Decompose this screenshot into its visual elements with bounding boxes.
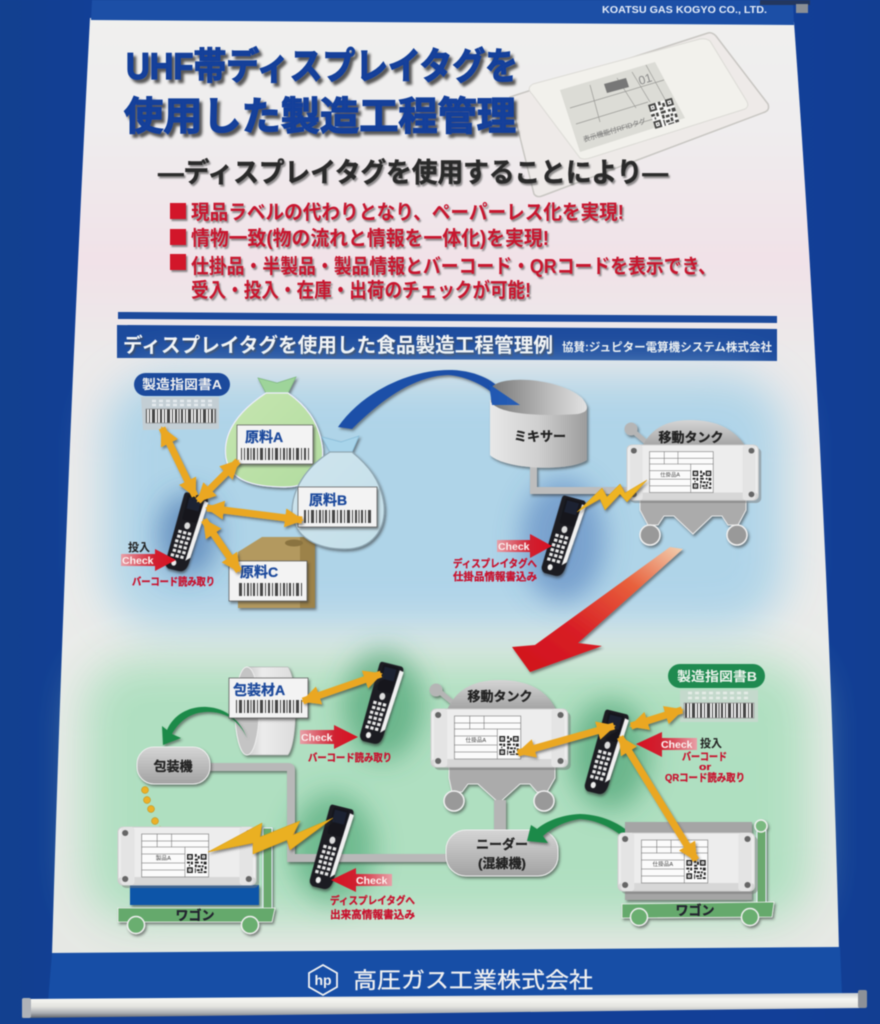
logo: hp xyxy=(314,972,332,988)
sponsor credit: 協賛:ジュピター電算機システム株式会社 xyxy=(562,340,772,354)
instruction sheet B pill: 製造指図書B xyxy=(677,669,757,684)
label: material C xyxy=(229,561,307,601)
handheld scanner xyxy=(359,661,405,747)
label: packaging material A: 包装材A xyxy=(233,682,285,698)
packaging machine xyxy=(137,747,210,784)
display tag on wagon: 仕掛品A xyxy=(653,860,673,868)
wireless lightning bolt xyxy=(577,480,647,512)
bag: material B xyxy=(292,436,384,549)
section heading text: ディスプレイタグを使用した食品製造工程管理例 xyxy=(123,333,553,357)
subtitle: —ディスプレイタグを使用することにより— xyxy=(158,157,668,188)
wagon with semi-finished goods xyxy=(622,820,774,926)
display tag on wagon xyxy=(118,827,259,888)
company name: 高圧ガス工業株式会社 xyxy=(353,968,593,993)
hanging rod xyxy=(22,990,867,1018)
scanner glows xyxy=(158,478,650,903)
big red transition arrow xyxy=(512,547,683,672)
double arrow xyxy=(303,674,381,701)
panel background: blue process xyxy=(105,375,785,630)
step: kneading xyxy=(430,664,774,926)
title: UHF帯ディスプレイタグを xyxy=(126,45,518,87)
wagon with finished goods xyxy=(118,828,275,934)
packaging machine: 包装機 xyxy=(153,759,193,774)
kneader machine xyxy=(446,830,558,876)
top blue band xyxy=(91,0,810,25)
barcode reading caption: バーコード読み取り xyxy=(132,575,215,588)
moving tank (lower): 移動タンク xyxy=(467,689,533,704)
panel background: green process xyxy=(85,660,810,922)
green arc arrow xyxy=(527,814,640,845)
handheld scanner xyxy=(540,495,587,579)
check arrow xyxy=(636,732,697,757)
kneader machine: (混練機) xyxy=(478,856,526,871)
handheld scanner xyxy=(308,804,355,892)
check arrow xyxy=(300,725,358,749)
write caption xyxy=(453,557,537,583)
write caption: ディスプレイタグへ xyxy=(453,557,537,570)
wireless lightning bolt xyxy=(208,818,333,854)
logo xyxy=(309,965,337,995)
label: material A: 原料A xyxy=(245,429,283,445)
photo of display tag: 01 xyxy=(637,70,654,88)
benefit bullets: 現品ラベルの代わりとなり、ペーパーレス化を実現! xyxy=(191,201,624,224)
photo of display tag xyxy=(510,33,769,197)
wagon with semi-finished goods: ワゴン xyxy=(675,903,715,918)
moving tank (upper): 移動タンク xyxy=(658,430,724,445)
check arrow: Check xyxy=(498,541,530,553)
dotted transfer path xyxy=(142,786,164,834)
divider bar xyxy=(118,312,777,323)
title xyxy=(124,45,518,139)
barcode or QR caption xyxy=(665,751,745,784)
benefit bullets xyxy=(170,201,716,302)
mixer xyxy=(489,380,640,494)
barcode reading caption: バーコード読み取り xyxy=(308,751,392,764)
write caption: ディスプレイタグへ xyxy=(330,894,415,907)
label: material B xyxy=(298,487,377,527)
instruction sheet B barcode xyxy=(680,690,758,722)
step: write to tag xyxy=(453,480,647,583)
kneader machine: ニーダー xyxy=(476,837,528,852)
instruction sheet A pill xyxy=(134,373,230,396)
moving tank (lower) xyxy=(430,680,556,832)
write caption: 出来高情報書込み xyxy=(330,908,416,921)
footer band xyxy=(48,947,842,1002)
instruction sheet A barcode xyxy=(141,397,219,430)
handheld scanner xyxy=(164,491,209,574)
instruction sheet A pill: 製造指図書A xyxy=(142,377,223,392)
label: material B: 原料B xyxy=(309,492,347,508)
display tag on tank xyxy=(431,709,571,770)
benefit bullets: 仕掛品・半製品・製品情報とバーコード・QRコードを表示でき、 xyxy=(191,255,716,278)
double arrows to scanner xyxy=(162,428,302,571)
photo of display tag: 表示機能付RFIDタグ xyxy=(582,116,647,144)
input label: 投入 xyxy=(700,736,722,750)
step: packaging xyxy=(118,661,450,934)
check arrow xyxy=(331,868,392,892)
barcode or QR caption: or xyxy=(699,762,711,773)
check arrow xyxy=(121,549,176,571)
display tag on tank xyxy=(627,445,761,503)
check arrow: Check xyxy=(122,555,154,567)
check arrow: Check xyxy=(301,732,333,744)
label: material A xyxy=(237,425,313,464)
packaging roll xyxy=(235,667,296,755)
barcode or QR caption: QRコード読み取り xyxy=(665,771,745,784)
write caption: 仕掛品情報書込み xyxy=(453,570,537,583)
pipe xyxy=(208,767,450,858)
handheld scanner xyxy=(583,709,630,797)
barcode or QR caption: バーコード xyxy=(682,751,727,763)
double arrows xyxy=(518,710,696,860)
display tag on wagon: 製品A xyxy=(156,854,171,862)
wagon with finished goods: ワゴン xyxy=(175,908,215,923)
section heading bar xyxy=(117,325,777,361)
instruction sheet B pill xyxy=(668,664,765,688)
check arrow xyxy=(497,534,552,558)
green arc arrow xyxy=(162,707,247,745)
benefit bullets: 受入・投入・在庫・出荷のチェックが可能! xyxy=(191,278,531,302)
display tag on tank: 仕掛品A xyxy=(466,736,486,744)
write caption xyxy=(330,894,416,921)
blue curved arrow xyxy=(338,370,520,429)
mixer: ミキサー xyxy=(514,429,566,444)
input label: 投入 xyxy=(128,540,150,554)
label: packaging material A xyxy=(229,678,308,718)
display tag on wagon xyxy=(618,833,758,894)
benefit bullets: 情物一致(物の流れと情報を一体化)を実現! xyxy=(191,227,549,250)
check arrow: Check xyxy=(356,875,388,887)
company name in English: KOATSU GAS KOGYO CO., LTD. xyxy=(602,5,767,16)
title: 使用した製造工程管理 xyxy=(124,96,516,139)
check arrow: Check xyxy=(661,739,693,751)
box: material C xyxy=(238,537,315,608)
label: material C: 原料C xyxy=(240,564,278,580)
step: raw materials input xyxy=(121,373,384,608)
display tag on tank: 仕掛品A xyxy=(660,470,680,478)
moving tank (upper) xyxy=(624,420,747,545)
bag: material A xyxy=(225,377,323,487)
